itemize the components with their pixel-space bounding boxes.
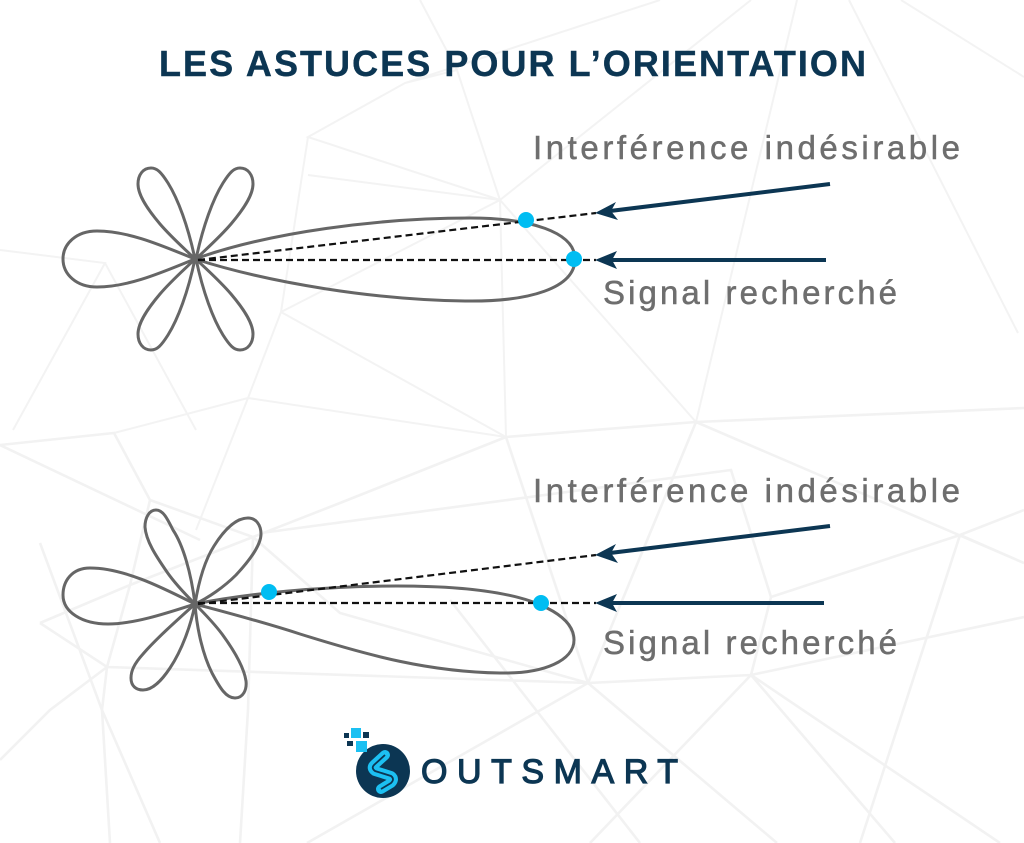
dashed lines of sight <box>198 555 596 604</box>
arrow: wanted signal <box>595 594 824 612</box>
dashed lines of sight <box>198 213 596 260</box>
label: interference: Interférence indésirable <box>533 129 960 166</box>
logo: Outsmart <box>344 728 678 798</box>
antenna pattern rotated <box>63 510 574 698</box>
label: signal: Signal recherché <box>603 624 897 661</box>
title: LES ASTUCES POUR L’ORIENTATION <box>159 43 866 84</box>
arrow: wanted signal <box>595 251 826 269</box>
diagram: favourable orientation <box>63 129 960 350</box>
label: signal: Signal recherché <box>603 274 897 311</box>
antenna pattern with main lobe on signal <box>63 168 575 350</box>
diagram: rejected interference orientation <box>63 472 960 698</box>
arrow: unwanted interference <box>595 526 830 563</box>
marker points <box>261 584 549 611</box>
label: interference: Interférence indésirable <box>533 472 960 509</box>
arrow: unwanted interference <box>595 184 830 220</box>
marker points <box>518 212 582 267</box>
wordmark: OUTSMART <box>421 753 678 791</box>
icon: logo mark <box>344 728 410 798</box>
